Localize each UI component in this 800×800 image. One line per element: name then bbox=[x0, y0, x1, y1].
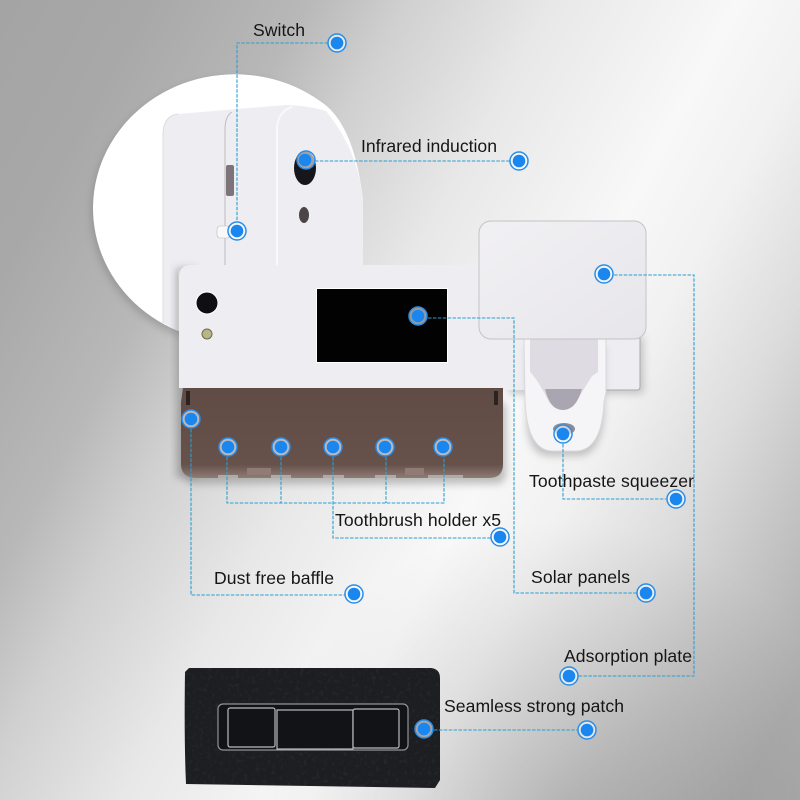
brush slots bbox=[218, 468, 463, 478]
panel: magnified circular inset bbox=[91, 74, 363, 335]
callout: seamless strong patch: Seamless strong patch bbox=[444, 696, 624, 716]
infrared sensor bbox=[294, 151, 316, 185]
solar panel bbox=[316, 288, 448, 362]
callout: dust free baffle: Dust free baffle bbox=[214, 568, 334, 588]
switch slider bbox=[217, 226, 230, 238]
dust free baffle panel bbox=[181, 388, 503, 478]
nozzle opening bbox=[545, 389, 582, 410]
callout: seamless strong patch bbox=[415, 696, 624, 739]
device side view bbox=[163, 105, 363, 331]
panel: back plate and squeezer mount bbox=[500, 330, 644, 394]
callout: switch bbox=[228, 20, 346, 240]
clear hook bbox=[218, 704, 408, 750]
callout: solar panels bbox=[409, 307, 655, 602]
nozzle tip bbox=[553, 423, 575, 435]
callout: solar panels: Solar panels bbox=[531, 567, 630, 587]
small sensor bbox=[299, 207, 309, 223]
callout: dust free baffle bbox=[182, 410, 363, 603]
callout: toothbrush holder x5 bbox=[219, 438, 509, 546]
panel: toothpaste squeezer bbox=[524, 339, 606, 456]
callout: infrared induction bbox=[297, 136, 528, 170]
callout: adsorption plate bbox=[560, 265, 694, 685]
panel: seamless adhesive patch bbox=[185, 668, 440, 788]
callout: toothpaste squeezer: Toothpaste squeezer bbox=[529, 471, 694, 491]
callout: toothbrush holder x5: Toothbrush holder x5 bbox=[335, 510, 501, 530]
panel: squeezer cover box bbox=[479, 221, 646, 339]
power lens bbox=[196, 292, 218, 314]
callout: switch: Switch bbox=[253, 20, 305, 40]
indicator LED bbox=[202, 329, 212, 339]
panel: main toothbrush holder body bbox=[176, 265, 506, 484]
usb port bbox=[226, 165, 234, 196]
callout: toothpaste squeezer bbox=[529, 425, 694, 508]
callout: adsorption plate: Adsorption plate bbox=[564, 646, 692, 666]
callout: infrared induction: Infrared induction bbox=[361, 136, 497, 156]
